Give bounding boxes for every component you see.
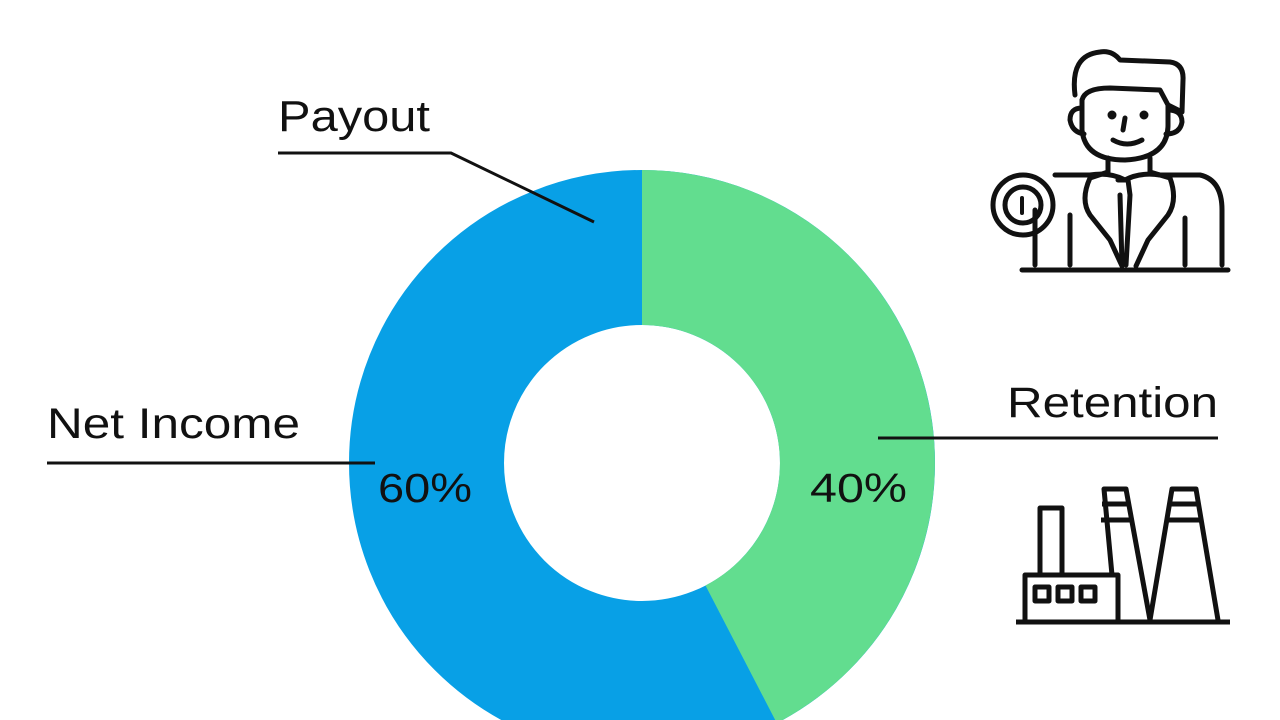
icon: factory bbox=[1016, 489, 1230, 622]
segment: net income (blue) bbox=[426, 248, 858, 678]
value: 40%: 40% bbox=[810, 465, 907, 511]
icon: businessman with badge bbox=[993, 52, 1228, 270]
value: 60%: 60% bbox=[378, 465, 472, 511]
label: Net Income: Net Income bbox=[47, 400, 300, 448]
label: Retention: Retention bbox=[1007, 379, 1218, 427]
segment: retention (green) bbox=[642, 170, 935, 720]
donut chart bbox=[426, 170, 935, 720]
label: Payout bbox=[278, 92, 594, 222]
label: Payout: Payout bbox=[278, 92, 430, 141]
